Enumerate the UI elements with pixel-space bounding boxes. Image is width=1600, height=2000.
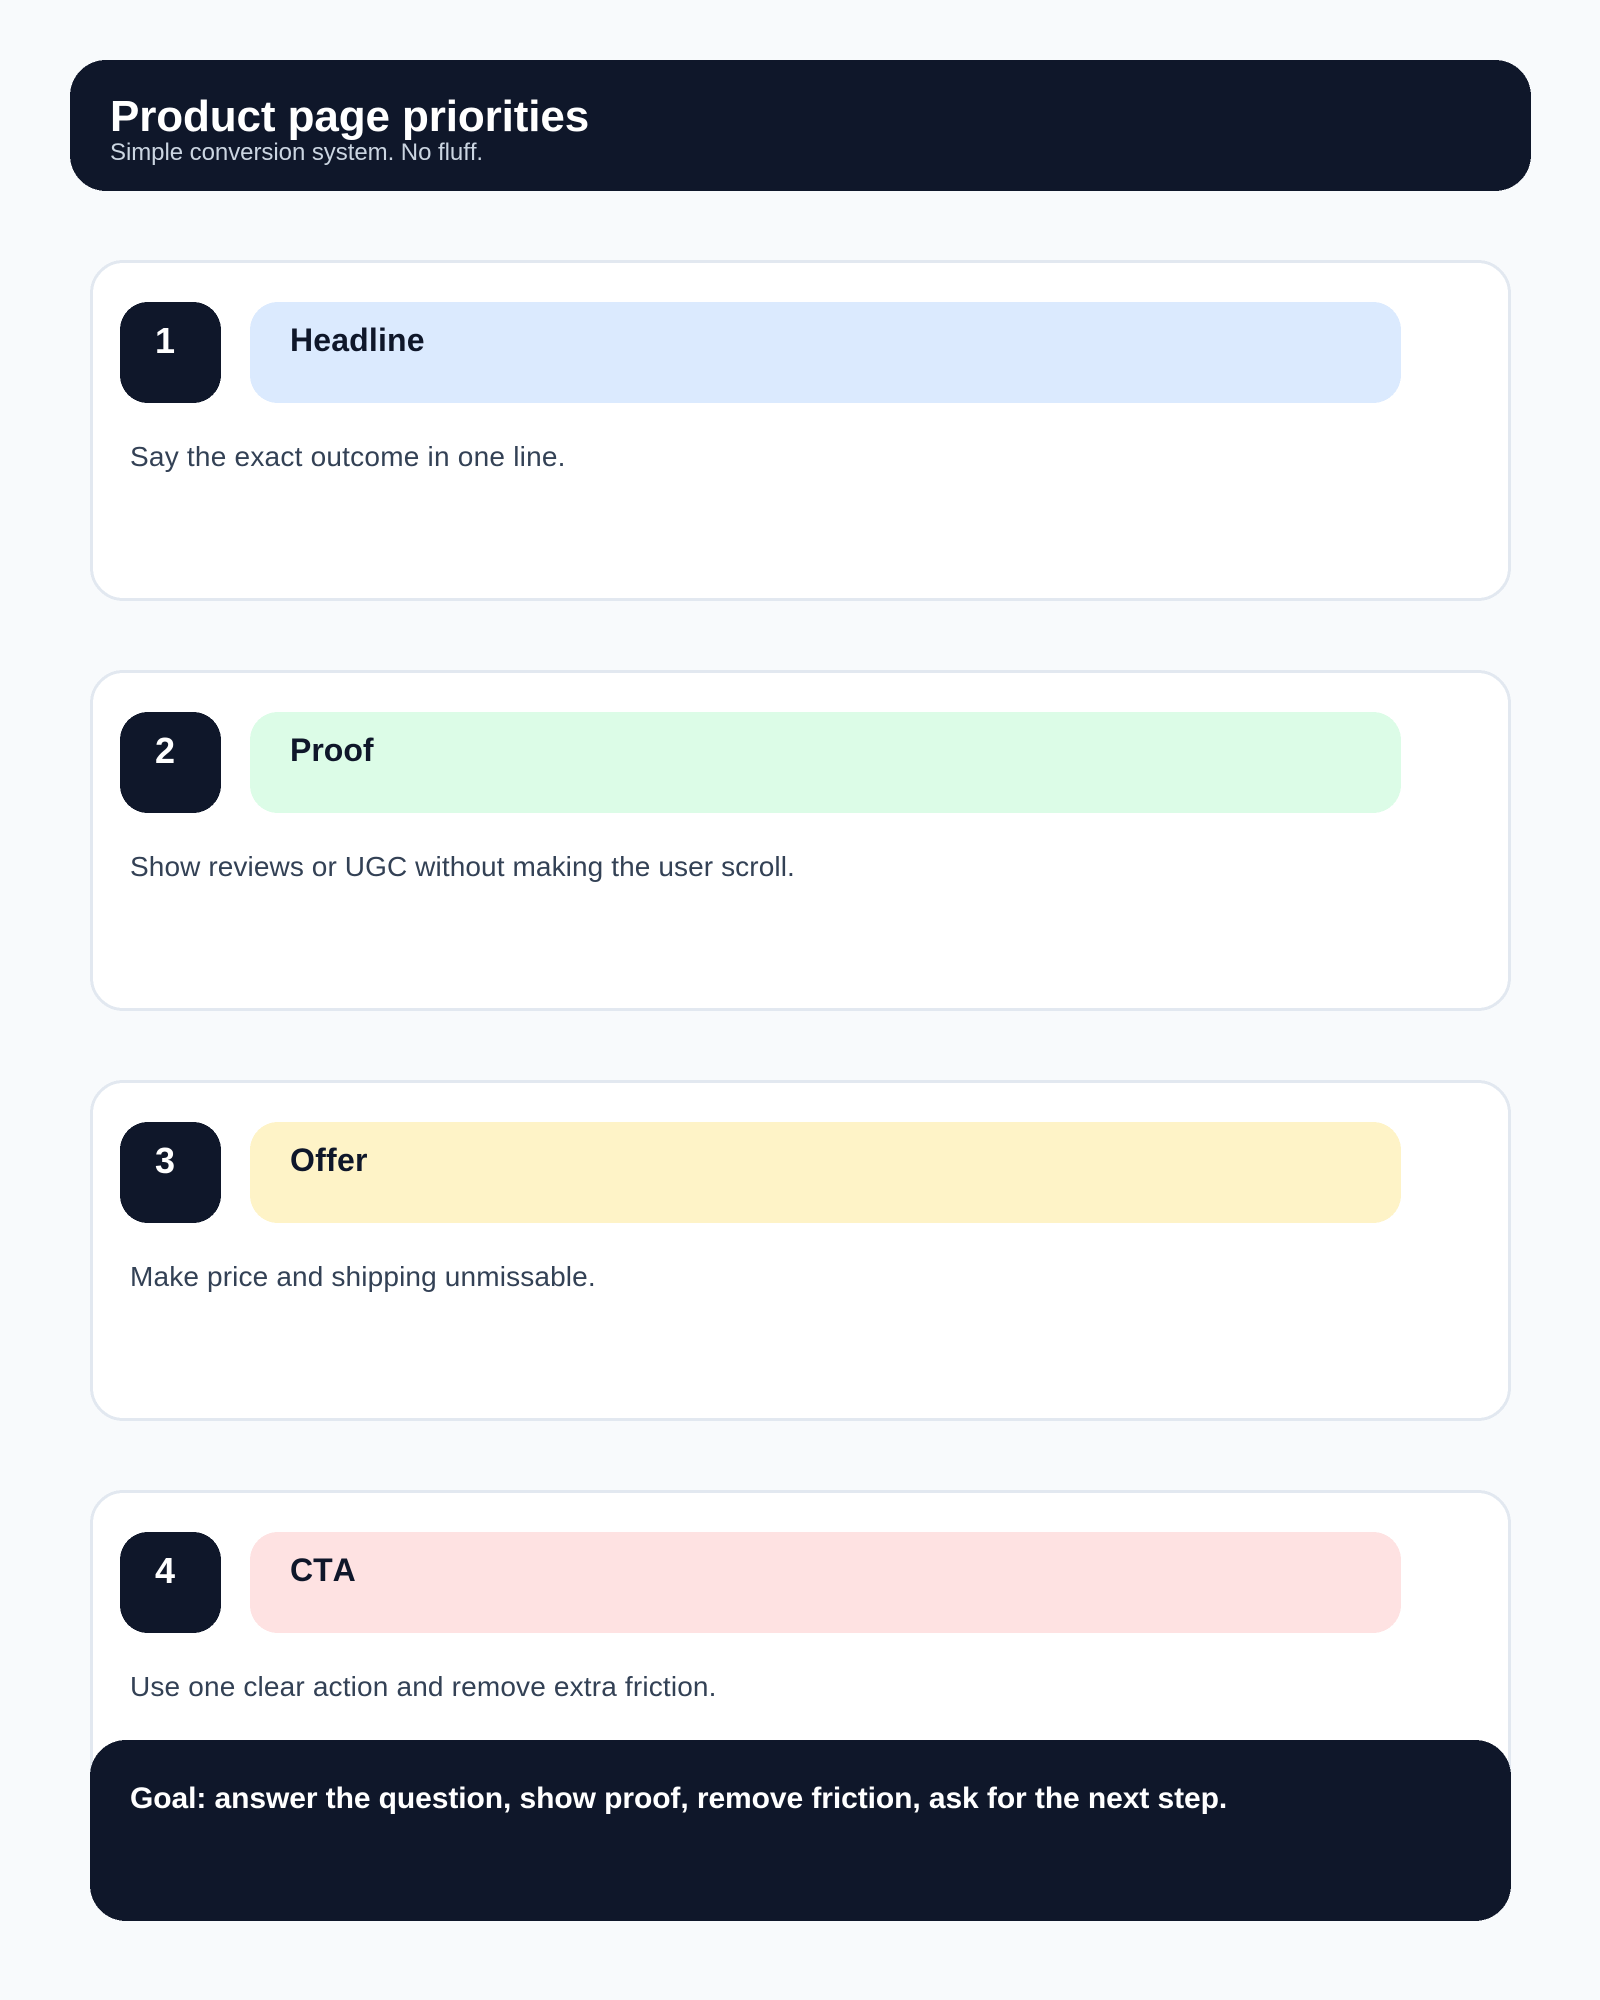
panel: step 3 offer [90, 1080, 1511, 1421]
title: Product page priorities [110, 92, 589, 141]
panel: step 2 proof [90, 670, 1511, 1011]
step number badge 4: 4 [155, 1550, 175, 1591]
panel: step 4 CTA [90, 1490, 1511, 1772]
step number badge 3: 3 [155, 1140, 175, 1181]
panel: step 1 headline [90, 260, 1511, 601]
subtitle: Simple conversion system. No fluff. [110, 139, 483, 166]
step number badge 2 [120, 712, 221, 813]
step number badge 1 [120, 302, 221, 403]
step number badge 3 [120, 1122, 221, 1223]
heading pill: Offer: Offer [290, 1142, 368, 1178]
heading pill: CTA [250, 1532, 1401, 1633]
description: Say the exact outcome in one line. [130, 441, 566, 472]
description: Show reviews or UGC without making the user scroll. [130, 851, 795, 882]
description: Make price and shipping unmissable. [130, 1261, 596, 1292]
heading pill: Headline [250, 302, 1401, 403]
description: Use one clear action and remove extra friction. [130, 1671, 717, 1702]
goal callout bar [90, 1740, 1511, 1921]
goal text: Goal: answer the question, show proof, remove friction, ask for the next step. [130, 1782, 1227, 1815]
heading pill: Headline: Headline [290, 322, 425, 358]
step number badge 4 [120, 1532, 221, 1633]
step number badge 1: 1 [155, 320, 175, 361]
heading pill: Offer [250, 1122, 1401, 1223]
heading pill: CTA: CTA [290, 1552, 356, 1588]
step number badge 2: 2 [155, 730, 175, 771]
heading pill: Proof [250, 712, 1401, 813]
header banner [70, 60, 1531, 191]
heading pill: Proof: Proof [290, 732, 374, 768]
